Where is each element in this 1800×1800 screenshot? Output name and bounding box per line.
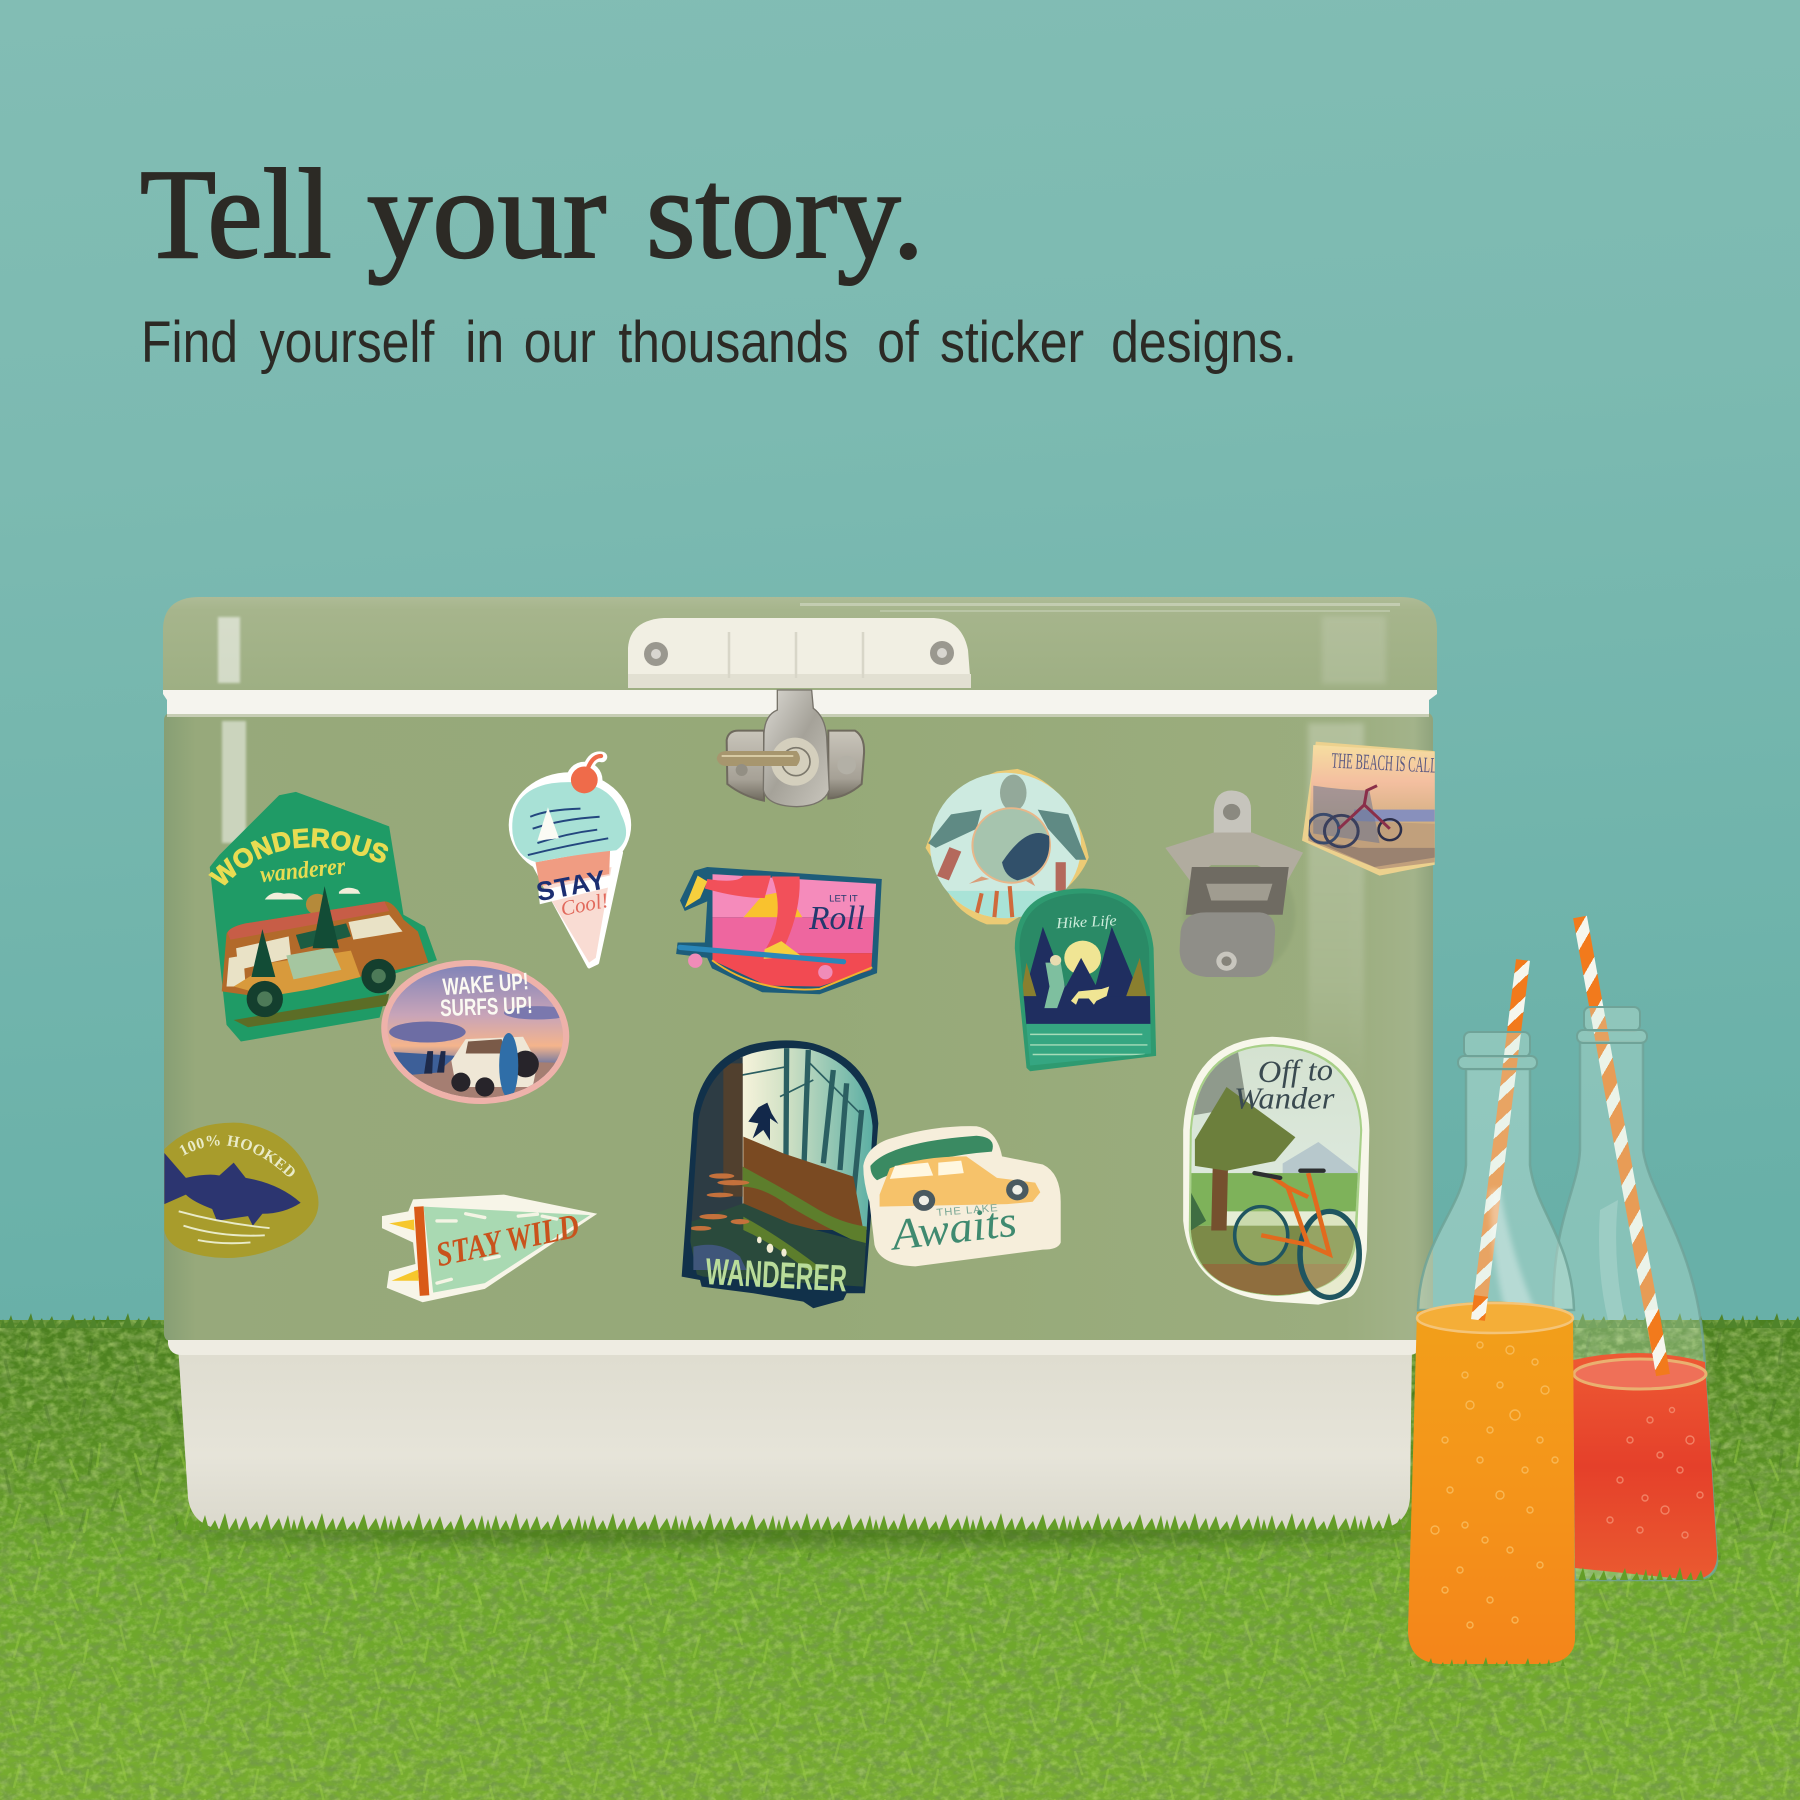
sticker script: Awaits	[886, 1196, 1019, 1260]
sticker small text: THE LAKE	[936, 1202, 999, 1219]
sticker: wonderous wanderer	[208, 792, 437, 1042]
latch metal	[717, 690, 864, 807]
stickers and hardware traced right half	[863, 742, 1438, 1305]
bottle: red drink	[1553, 917, 1717, 1580]
sticker: sea turtle	[926, 769, 1089, 924]
orange bottle straw	[1478, 960, 1523, 1320]
sticker: ice cream	[509, 756, 631, 966]
orange drink bubbles	[1431, 1342, 1558, 1628]
sticker: 100% hooked	[164, 1122, 318, 1258]
title	[140, 143, 924, 285]
sticker script: Cool!	[559, 888, 610, 921]
lid reflections	[218, 603, 1400, 684]
sticker text: STAY	[534, 864, 609, 907]
subtitle: in	[465, 311, 504, 375]
sticker: hike life	[1015, 889, 1156, 1071]
subtitle: yourself	[260, 311, 435, 375]
red bottle rim	[1577, 1007, 1647, 1043]
sticker: the beach is calling	[1302, 742, 1438, 876]
sticker text: 100% HOOKED	[180, 1134, 295, 1176]
cooler	[163, 597, 1437, 1543]
orange bottle rim	[1458, 1032, 1537, 1069]
red straw tip	[1652, 1310, 1663, 1375]
sticker script: wanderer	[259, 853, 348, 887]
grass overlapping base	[176, 1512, 1416, 1530]
red bottle reflections	[1599, 1200, 1625, 1320]
sticker script: Off to	[1257, 1053, 1334, 1089]
sticker: wake up surfs up	[381, 960, 570, 1104]
subtitle: Find	[141, 311, 238, 375]
lid	[163, 597, 1437, 690]
subtitle: of	[877, 311, 920, 375]
bottle opener	[1165, 790, 1303, 977]
red drink surface	[1574, 1359, 1706, 1389]
grass in front of bottles	[1410, 1566, 1716, 1666]
sticker: off to wander	[1183, 1037, 1369, 1305]
subtitle: our	[524, 311, 596, 375]
base rim	[168, 1340, 1420, 1355]
body reflection right	[1308, 723, 1364, 1093]
orange drink liquid	[1408, 1301, 1575, 1664]
sticker heading: WONDEROUS	[208, 828, 388, 886]
orange bottle reflection	[1490, 1190, 1535, 1310]
red drink bubbles	[1607, 1408, 1703, 1538]
red bottle glass	[1553, 1042, 1717, 1580]
sticker: wanderer bigfoot	[682, 1040, 878, 1308]
subtitle: thousands	[618, 311, 848, 375]
cooler base	[178, 1345, 1412, 1530]
fish	[164, 1153, 301, 1226]
white gasket	[163, 690, 1437, 716]
sticker: stay wild pennant	[382, 1195, 597, 1302]
sticker: the lake awaits	[863, 1126, 1061, 1266]
title: your	[367, 143, 606, 285]
subtitle: sticker	[940, 311, 1084, 375]
stickers and hardware traced left half	[164, 751, 922, 1302]
cooler base shadow	[170, 1525, 1430, 1543]
bicycle	[1235, 1171, 1359, 1297]
van illustration	[222, 886, 428, 1027]
red drink liquid	[1573, 1353, 1717, 1580]
sticker text: WANDERER	[705, 1251, 848, 1300]
body reflection left	[222, 721, 246, 843]
sticker text: THE BEACH IS CALL	[1331, 747, 1438, 778]
cooler body	[164, 712, 1433, 1342]
subtitle: designs.	[1111, 311, 1297, 375]
red straw behind glass	[1580, 917, 1663, 1375]
title: Tell	[140, 143, 332, 285]
sticker small text: LET IT	[829, 893, 858, 904]
sticker text line two: SURFS UP!	[440, 992, 533, 1022]
sticker text: WAKE UP!	[442, 969, 529, 1001]
sticker script: Roll	[808, 900, 865, 937]
grass ground	[0, 1312, 1800, 1800]
latch handle	[628, 618, 971, 688]
bigfoot	[748, 1103, 778, 1141]
sticker text: STAY WILD	[433, 1206, 582, 1274]
sticker: let it roll	[676, 867, 882, 994]
title: story.	[646, 143, 924, 285]
orange drink surface	[1417, 1303, 1573, 1333]
bottle: orange drink	[1408, 960, 1575, 1664]
sticker script line two: Wander	[1234, 1081, 1335, 1115]
wall background	[0, 0, 1800, 1340]
orange straw submerged	[1478, 1296, 1481, 1320]
orange bottle glass	[1418, 1069, 1574, 1310]
sticker text: Hike Life	[1055, 913, 1117, 932]
